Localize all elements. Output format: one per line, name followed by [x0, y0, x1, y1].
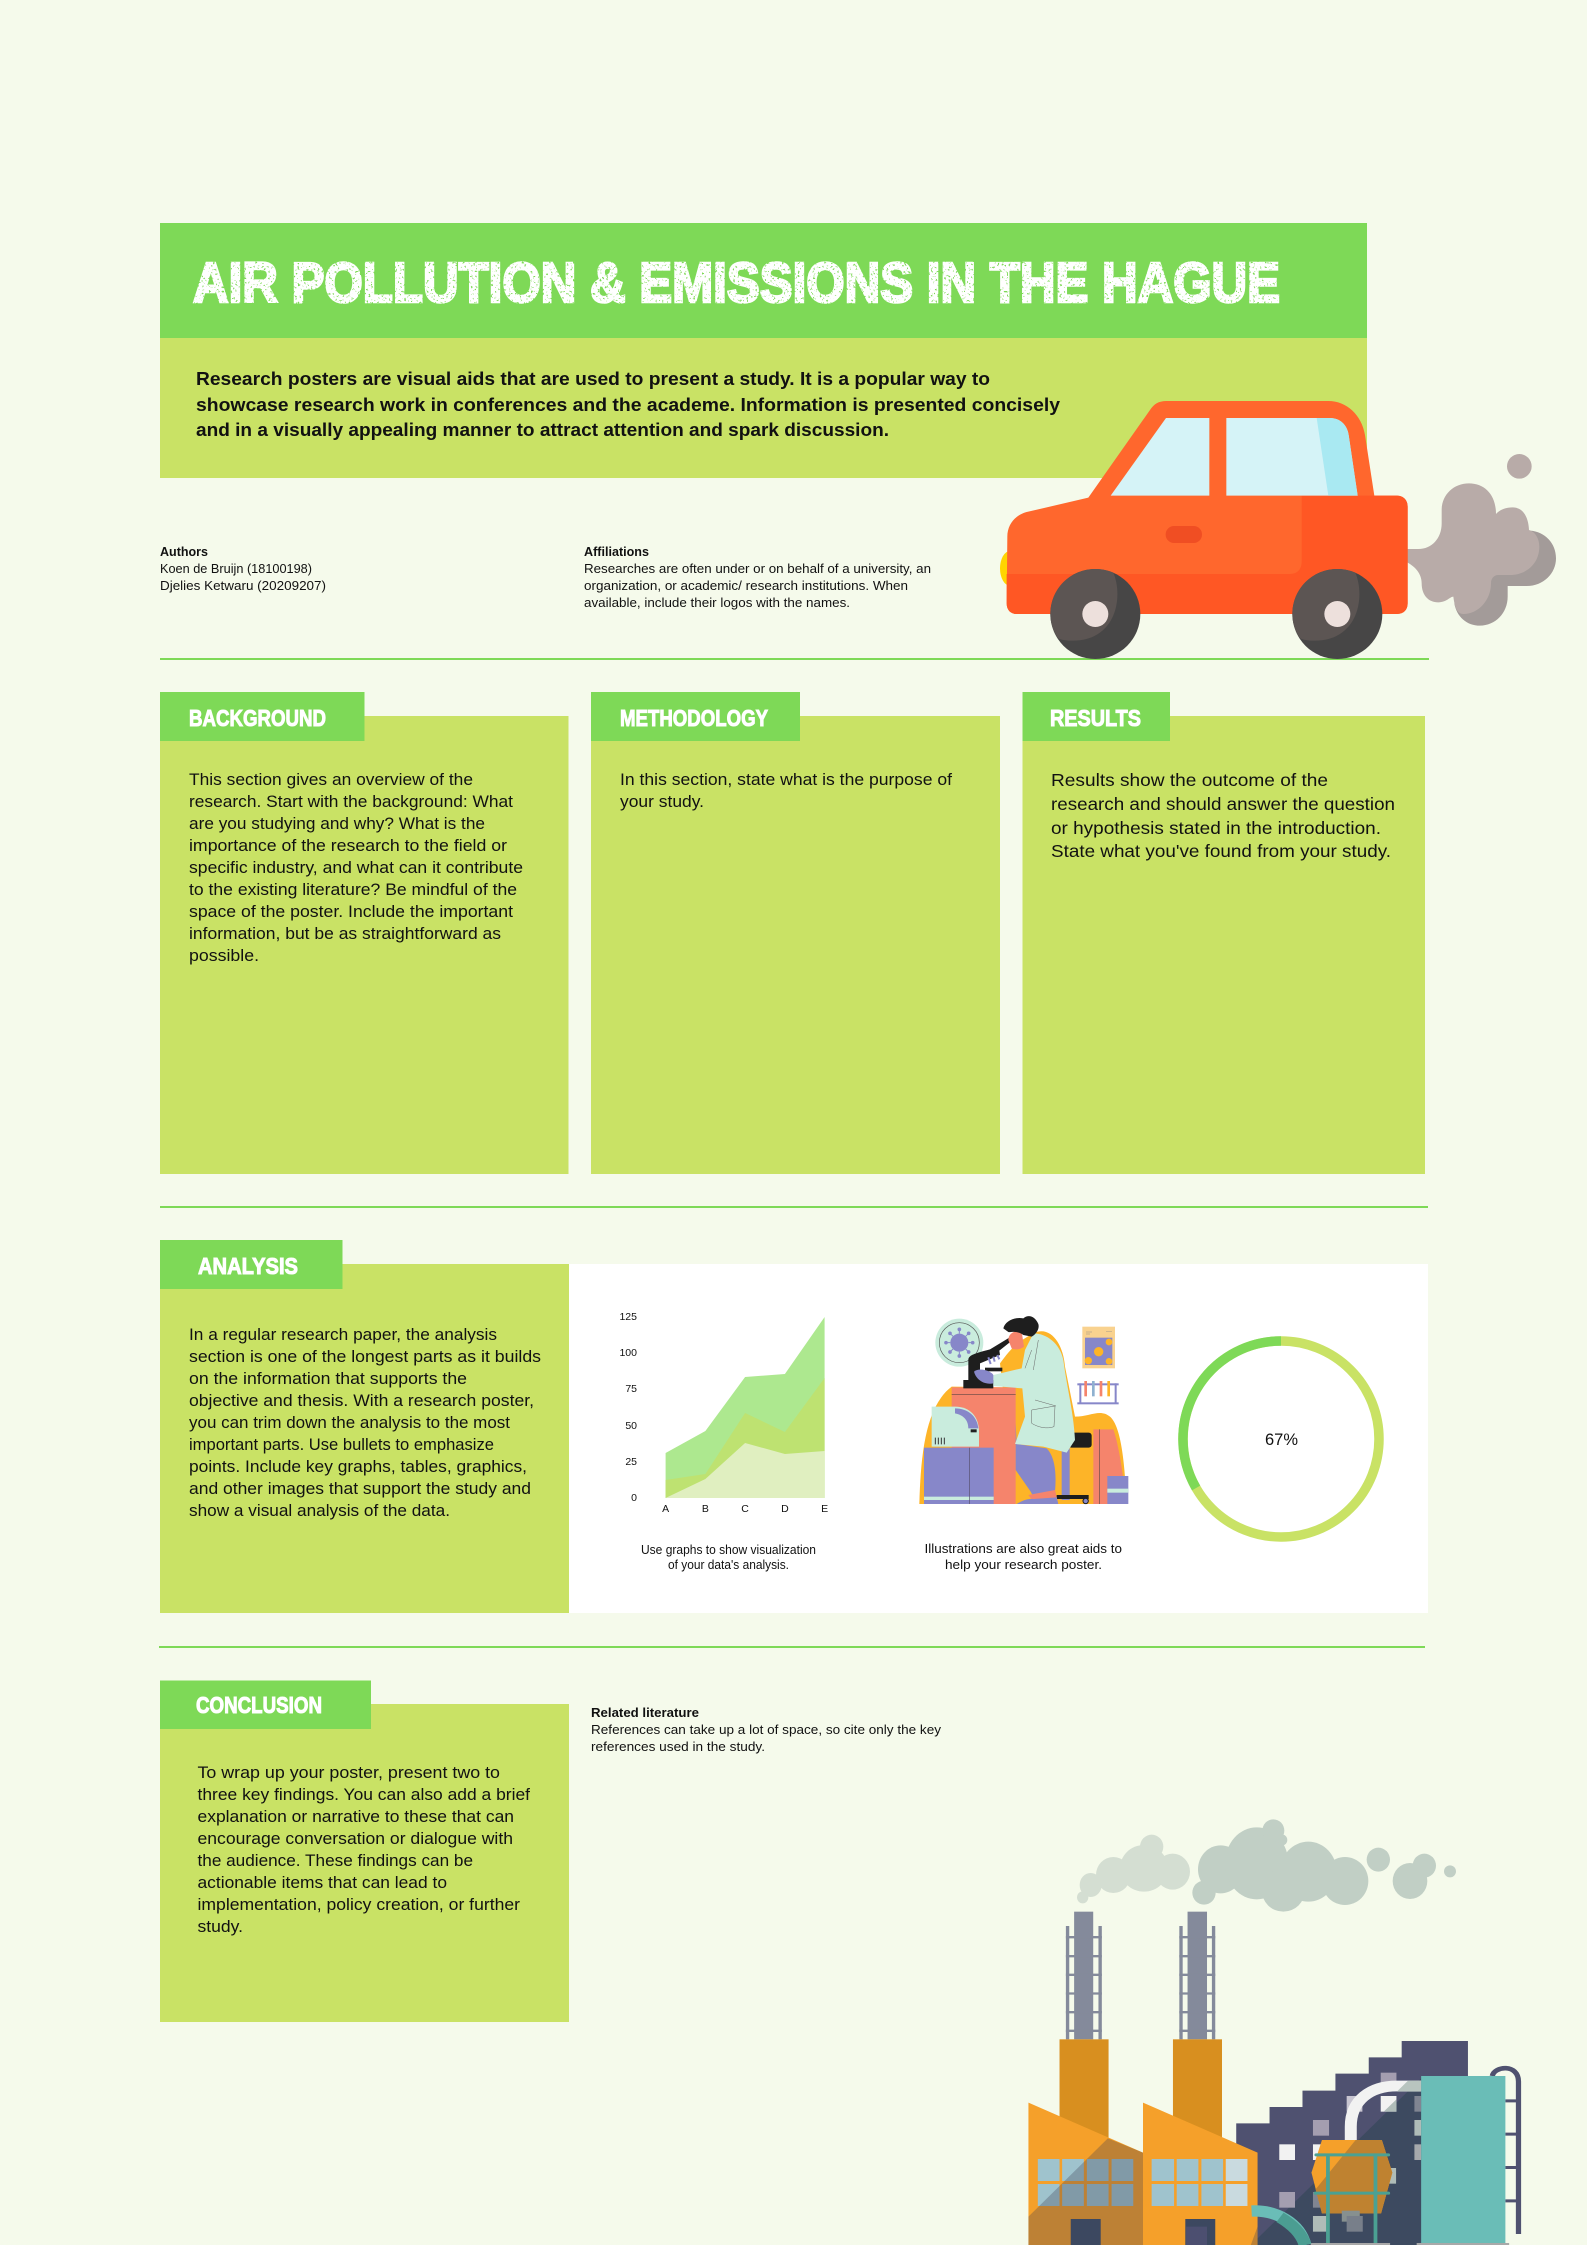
text: background body: specific industry, and what can it contribute: [189, 859, 523, 877]
area chart: E: [821, 1503, 828, 1515]
caption: illustration: [924, 1541, 1122, 1572]
text: results body: or hypothesis stated in the introduction.: [1051, 818, 1381, 838]
heading: background: BACKGROUND: [189, 705, 326, 731]
text: conclusion body: implementation, policy creation, or further: [198, 1896, 521, 1914]
text: methodology body: In this section, state what is the purpose of: [620, 771, 952, 789]
intro panel: and in a visually appealing manner to attract attention and spark discussion.: [196, 419, 889, 440]
text: analysis body: section is one of the longest parts as it builds: [189, 1348, 541, 1366]
area chart: [619, 1311, 828, 1515]
text: background body: to the existing literature? Be mindful of the: [189, 881, 517, 899]
area chart: 50: [625, 1420, 637, 1432]
panel: methodology: [591, 692, 1000, 1174]
heading: conclusion: [160, 1680, 371, 1729]
heading: analysis: [160, 1240, 342, 1289]
text: conclusion body: the audience. These findings can be: [198, 1852, 473, 1870]
text: analysis body: objective and thesis. With a research poster,: [189, 1392, 534, 1410]
text: related literature: Related literature: [591, 1706, 699, 1720]
intro panel: Research posters are visual aids that are used to present a study. It is a popular way to: [196, 368, 990, 389]
text: results body: Results show the outcome of the: [1051, 770, 1328, 790]
icon: scientist illustration: [919, 1316, 1128, 1504]
text: analysis body: show a visual analysis of the data.: [189, 1502, 450, 1520]
area chart: 25: [625, 1456, 637, 1468]
icon: car: [1000, 401, 1408, 659]
text: analysis body: points. Include key graphs, tables, graphics,: [189, 1458, 527, 1476]
panel: background: [160, 692, 568, 1174]
text: results body: [1051, 770, 1395, 861]
area chart: 75: [625, 1383, 637, 1395]
text: conclusion body: study.: [198, 1918, 243, 1936]
area chart: 125: [619, 1311, 637, 1323]
affiliations: Researches are often under or on behalf of a university, an: [584, 562, 931, 576]
text: conclusion body: [198, 1764, 530, 1936]
authors: [160, 545, 326, 593]
icon: factory: [1028, 1912, 1518, 2245]
affiliations: [584, 545, 931, 610]
heading: results: RESULTS: [1050, 705, 1141, 731]
area chart: D: [781, 1503, 789, 1515]
text: related literature: references used in the study.: [591, 1740, 765, 1754]
text: background body: space of the poster. Include the important: [189, 903, 513, 921]
text: analysis body: you can trim down the analysis to the most: [189, 1414, 510, 1432]
affiliations: Affiliations: [584, 545, 649, 559]
caption: illustration: help your research poster.: [945, 1557, 1102, 1572]
caption: chart: of your data's analysis.: [668, 1558, 789, 1572]
text: background body: research. Start with the background: What: [189, 793, 513, 811]
heading: analysis: ANALYSIS: [198, 1253, 298, 1279]
area chart: 100: [619, 1347, 637, 1359]
text: results body: research and should answer the question: [1051, 794, 1395, 814]
intro panel: showcase research work in conferences and the academe. Information is presented concisely: [196, 394, 1061, 415]
text: analysis body: important parts. Use bullets to emphasize: [189, 1436, 494, 1454]
affiliations: available, include their logos with the names.: [584, 596, 850, 610]
heading: background: [160, 692, 364, 741]
donut chart 67%: 67%: [1265, 1430, 1298, 1449]
text: background body: This section gives an overview of the: [189, 771, 473, 789]
panel: conclusion: [160, 1680, 569, 2022]
text: background body: are you studying and why? What is the: [189, 815, 485, 833]
text: background body: possible.: [189, 947, 259, 965]
title banner: AIR POLLUTION & EMISSIONS IN THE HAGUE: [193, 251, 1280, 315]
icon: factory smoke clouds: [1077, 1819, 1456, 1912]
area chart: C: [741, 1503, 749, 1515]
title banner: [160, 223, 1367, 338]
caption: chart: Use graphs to show visualization: [641, 1543, 816, 1557]
caption: chart: [641, 1543, 816, 1572]
heading: conclusion: CONCLUSION: [196, 1692, 322, 1718]
text: background body: information, but be as straightforward as: [189, 925, 501, 943]
text: analysis body: and other images that support the study and: [189, 1480, 531, 1498]
text: background body: [189, 771, 523, 965]
text: analysis body: In a regular research paper, the analysis: [189, 1326, 497, 1344]
intro panel: [160, 338, 1367, 478]
text: results body: State what you've found from your study.: [1051, 841, 1391, 861]
area chart: 0: [631, 1492, 637, 1504]
text: conclusion body: To wrap up your poster, present two to: [198, 1764, 500, 1782]
heading: results: [1022, 692, 1170, 741]
text: related literature: References can take up a lot of space, so cite only the key: [591, 1723, 942, 1737]
panel: analysis: [160, 1240, 569, 1613]
caption: illustration: Illustrations are also great aids to: [924, 1541, 1122, 1556]
panel: results: [1022, 692, 1425, 1174]
text: conclusion body: explanation or narrative to these that can: [198, 1808, 514, 1826]
text: conclusion body: actionable items that can lead to: [198, 1874, 447, 1892]
text: methodology body: your study.: [620, 793, 704, 811]
text: background body: importance of the research to the field or: [189, 837, 508, 855]
panel: analysis visuals: [569, 1264, 1428, 1613]
authors: Authors: [160, 545, 208, 559]
text: methodology body: [620, 771, 952, 811]
area chart: A: [662, 1503, 669, 1515]
text: conclusion body: three key findings. You can also add a brief: [198, 1786, 530, 1804]
text: analysis body: [189, 1326, 541, 1520]
text: analysis body: on the information that supports the: [189, 1370, 467, 1388]
icon: exhaust smoke: [1407, 454, 1556, 626]
authors: Koen de Bruijn (18100198): [160, 562, 312, 576]
heading: methodology: [591, 692, 800, 741]
affiliations: organization, or academic/ research institutions. When: [584, 579, 908, 593]
heading: methodology: METHODOLOGY: [620, 705, 768, 731]
authors: Djelies Ketwaru (20209207): [160, 579, 326, 593]
donut chart 67%: [1183, 1341, 1379, 1537]
area chart: B: [702, 1503, 709, 1515]
text: related literature: [591, 1706, 942, 1754]
text: conclusion body: encourage conversation or dialogue with: [198, 1830, 513, 1848]
